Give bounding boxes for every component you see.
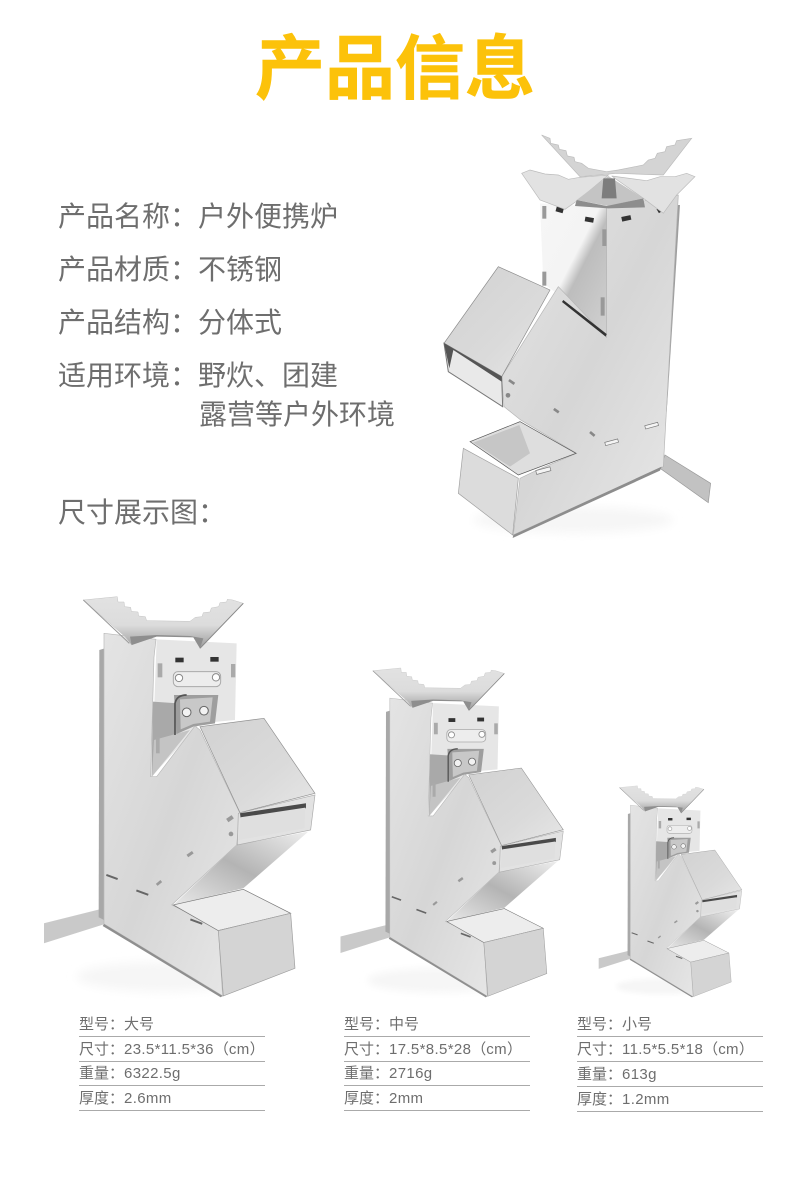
spec table: medium: 重量：2716g [344,1065,432,1082]
spec table: medium: 尺寸：17.5*8.5*28（cm） [344,1041,522,1058]
spec table: large: 厚度：2.6mm [79,1090,172,1107]
spec table: large: 型号：大号 [79,1016,154,1033]
spec table: small: 厚度：1.2mm [577,1091,670,1108]
spec table: large: 尺寸：23.5*11.5*36（cm） [79,1041,265,1058]
heading: size display: 尺寸展示图： [58,497,226,528]
spec table: medium: 厚度：2mm [344,1090,423,1107]
photo: assembled stove top right [444,135,711,538]
photo: large stove [44,597,315,997]
spec table: small: 重量：613g [577,1066,657,1083]
spec table: large: 重量：6322.5g [79,1065,181,1082]
spec table: medium [344,1016,530,1111]
title: 产品信息 [255,30,535,108]
spec table: small [577,1016,763,1112]
spec table: small: 尺寸：11.5*5.5*18（cm） [577,1041,754,1058]
photo: medium stove [341,668,563,997]
text: applicable environment: 露营等户外环境 [199,399,395,430]
spec table: small: 型号：小号 [577,1016,652,1033]
spec table: large [79,1016,265,1111]
text: product name: 产品名称：户外便携炉 [58,201,338,232]
text: product material: 产品材质：不锈钢 [58,254,282,285]
text: product structure: 产品结构：分体式 [58,307,282,338]
text: applicable environment [58,360,395,430]
text: applicable environment: 适用环境：野炊、团建 [58,360,338,391]
photo: small stove [599,786,742,997]
spec table: medium: 型号：中号 [344,1016,419,1033]
